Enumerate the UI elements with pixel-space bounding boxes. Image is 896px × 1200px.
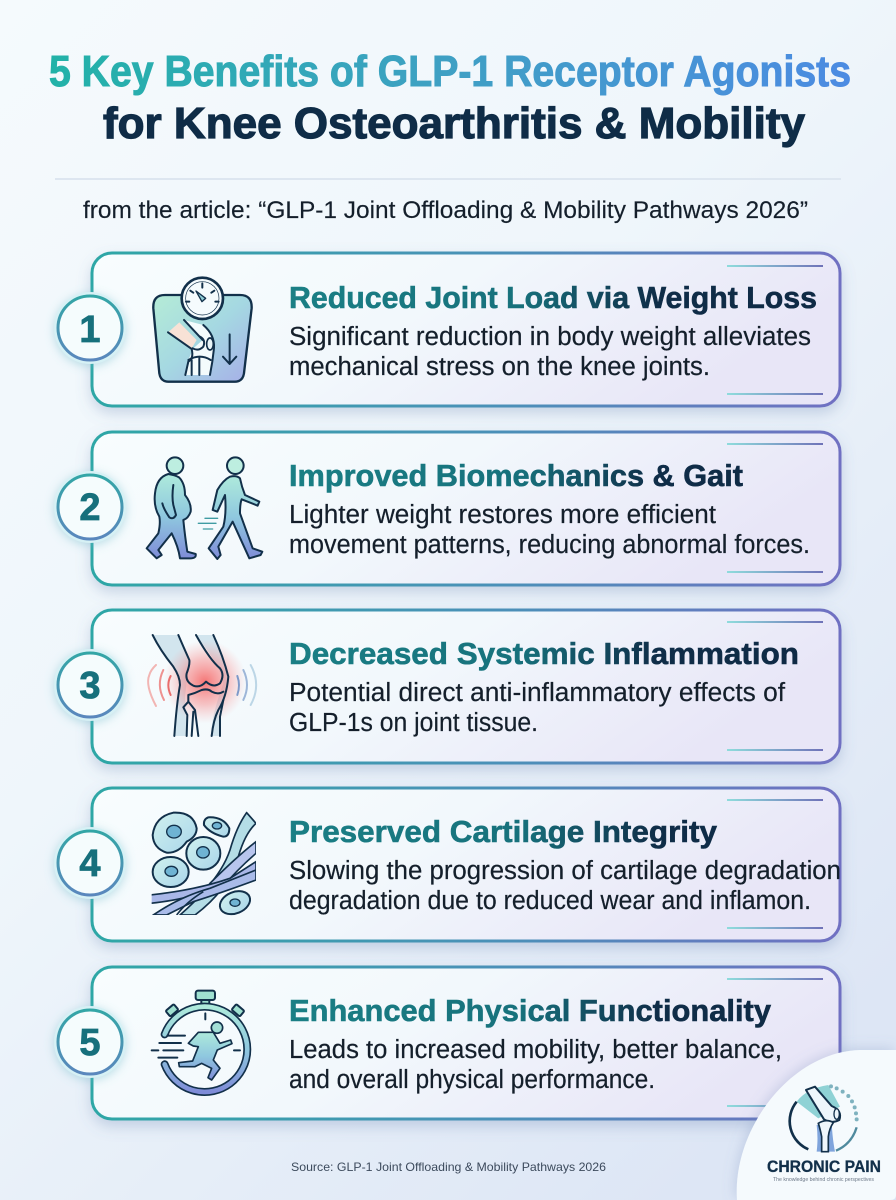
- number badge 1: 1: [79, 309, 101, 351]
- description: [289, 1036, 782, 1094]
- heading: Enhanced Physical Functionality: [289, 993, 772, 1028]
- heading: Improved Biomechanics & Gait: [289, 458, 743, 493]
- description: Lighter weight restores more efficient: [289, 501, 716, 529]
- number badge 4: 4: [79, 843, 101, 885]
- panel: benefit 1: [54, 253, 840, 406]
- logo tagline: The knowledge behind chronic perspectives: [773, 1177, 875, 1183]
- number badge 5: 5: [79, 1022, 101, 1064]
- number badge 3: 3: [79, 665, 101, 707]
- panel: benefit 2: [54, 432, 840, 585]
- description: [289, 323, 811, 381]
- description: movement patterns, reducing abnormal forces.: [289, 531, 810, 559]
- panel: benefit 3: [54, 610, 840, 763]
- card background: [92, 967, 840, 1119]
- title: for Knee Osteoarthritis & Mobility: [103, 99, 806, 148]
- panel: benefit 4: [54, 788, 841, 941]
- description: [289, 679, 786, 737]
- description: and overall physical performance.: [289, 1066, 655, 1094]
- number badge 2: [54, 471, 126, 543]
- number badge 2: 2: [79, 487, 101, 529]
- card background: [92, 788, 840, 941]
- logo mark: knee: [790, 1084, 859, 1152]
- number badge 1: [54, 292, 126, 364]
- card background: [92, 610, 840, 763]
- description: mechanical stress on the knee joints.: [289, 353, 710, 381]
- panel: benefit 5: [54, 967, 840, 1119]
- source note: Source: GLP-1 Joint Offloading & Mobility Pathways 2026: [291, 1160, 606, 1174]
- number badge 4: [54, 827, 126, 899]
- number badge 5: [54, 1006, 126, 1078]
- card background: [92, 253, 840, 406]
- icon: cartilage cells and fibres: [150, 813, 256, 918]
- heading: Reduced Joint Load via Weight Loss: [289, 280, 817, 315]
- description: Potential direct anti-inflammatory effects of: [289, 679, 786, 707]
- icon: inflamed knee joint: [148, 635, 256, 736]
- description: [289, 501, 810, 559]
- description: degradation due to reduced wear and inflamon.: [289, 887, 811, 915]
- card background: [92, 432, 840, 585]
- icon: stopwatch with runner: [152, 991, 247, 1092]
- logo: chronic pain: [737, 1050, 896, 1200]
- heading: Decreased Systemic Inflammation: [289, 636, 799, 671]
- logo backdrop: [737, 1050, 896, 1200]
- icon: heavier and lighter walking figures: [147, 457, 262, 559]
- heading: Preserved Cartilage Integrity: [289, 814, 718, 849]
- description: [289, 857, 841, 915]
- title: [49, 47, 851, 148]
- number badge 3: [54, 649, 126, 721]
- description: Slowing the progression of cartilage degradation: [289, 857, 841, 885]
- description: Significant reduction in body weight alleviates: [289, 323, 811, 351]
- description: Leads to increased mobility, better balance,: [289, 1036, 782, 1064]
- icon: scale with knee: [153, 278, 252, 382]
- subtitle: from the article: “GLP-1 Joint Offloading & Mobility Pathways 2026”: [83, 197, 808, 224]
- logo wordmark: CHRONIC PAIN: [767, 1157, 881, 1176]
- description: GLP-1s on joint tissue.: [289, 709, 538, 737]
